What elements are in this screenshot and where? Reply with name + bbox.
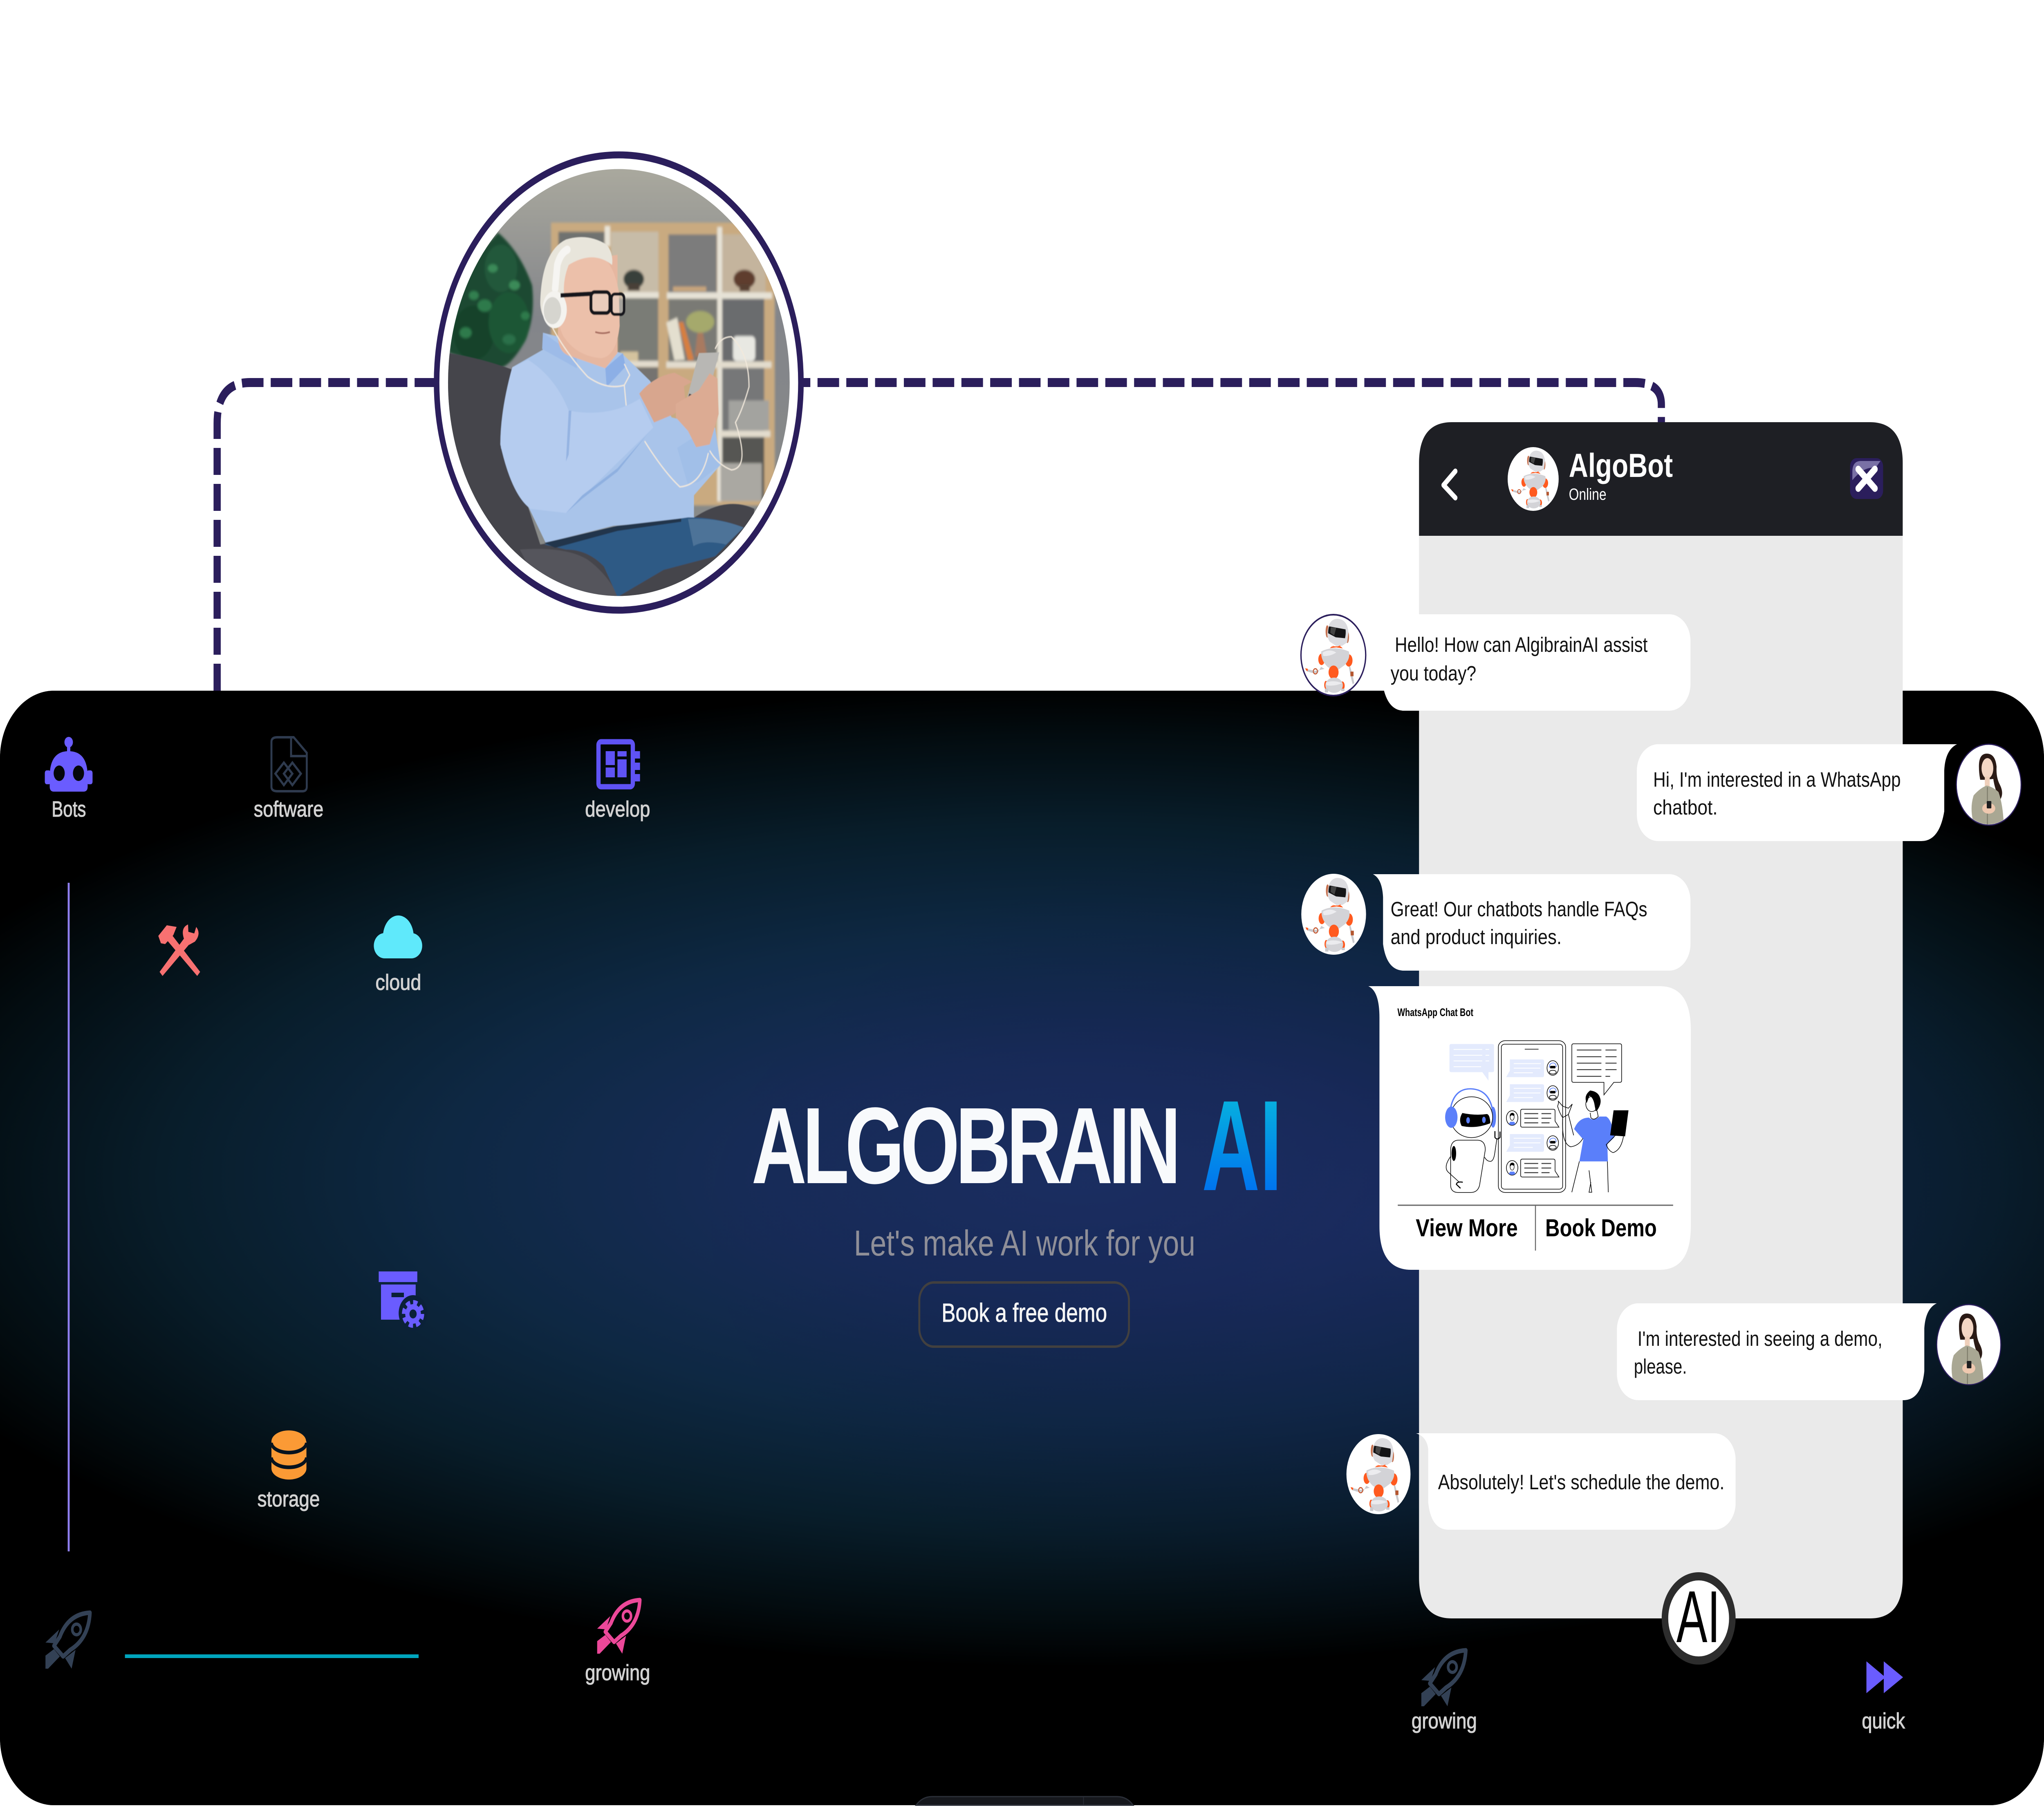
label: storage: storage — [258, 1487, 320, 1511]
header title: Online — [1569, 485, 1607, 504]
tagline: Let's make AI work for you — [854, 1223, 1195, 1263]
icon: quick arrows — [1867, 1661, 1903, 1693]
avatar: robot 1 — [1301, 615, 1366, 696]
bubble: bot greeting — [1370, 614, 1690, 711]
bubble: bot greeting: Hello! How can AlgibrainAI assist — [1395, 633, 1648, 656]
button: book a free demo: Book a free demo — [941, 1299, 1107, 1327]
bubble: bot greeting: you today? — [1391, 662, 1476, 685]
teal horizontal line — [125, 1654, 419, 1658]
header title: AlgoBot — [1569, 447, 1673, 484]
photo: senior man using phone — [437, 155, 801, 610]
brand heading: ALGOBRAIN — [751, 1085, 1177, 1206]
bubble: user demo request: please. — [1634, 1355, 1687, 1378]
card divider lines — [1398, 1205, 1673, 1251]
dark hero panel — [0, 691, 2044, 1805]
bubble: user whatsapp request: Hi, I'm interested in a WhatsApp — [1653, 768, 1901, 791]
brand heading: AI — [1202, 1074, 1282, 1217]
chat panel — [1419, 422, 1903, 1618]
label: software: software — [254, 797, 323, 821]
partial bottom bar — [916, 1797, 1133, 1805]
card: whatsapp chat bot — [1368, 986, 1691, 1270]
bubble: bot schedule reply — [1416, 1433, 1736, 1530]
icon: pink rocket — [597, 1600, 640, 1654]
icon: dark rocket left — [45, 1613, 90, 1669]
icon: cloud — [374, 915, 422, 958]
card action: view more: View More — [1416, 1214, 1518, 1242]
label: develop: develop — [585, 797, 650, 821]
icon: develop — [598, 742, 640, 787]
icon: software file — [271, 737, 307, 791]
bubble: user demo request: I'm interested in seeing a demo, — [1638, 1327, 1883, 1350]
bubble: bot FAQ reply: Great! Our chatbots handle FAQs — [1391, 897, 1647, 921]
icon: archive settings — [379, 1271, 428, 1331]
card title: WhatsApp Chat Bot — [1397, 1007, 1473, 1019]
card action: book demo: Book Demo — [1545, 1214, 1657, 1242]
vertical purple line — [68, 883, 69, 1551]
illustration: robot, phone and person chatting — [1445, 1041, 1629, 1193]
chat header back arrow — [1443, 471, 1455, 498]
close button — [1850, 458, 1883, 499]
icon: tools — [158, 924, 200, 976]
label: quick: quick — [1862, 1709, 1905, 1733]
bubble: user whatsapp request: chatbot. — [1653, 796, 1718, 819]
avatar: woman 2 — [1937, 1305, 2001, 1385]
icon: bots — [45, 737, 92, 792]
dashed connector line — [217, 383, 1661, 691]
bubble: bot FAQ reply — [1373, 874, 1690, 971]
header title — [1569, 447, 1673, 504]
button: book a free demo — [919, 1282, 1129, 1347]
icon: storage database — [271, 1430, 307, 1479]
label: Bots: Bots — [52, 797, 86, 821]
avatar: woman 1 — [1957, 744, 2021, 826]
brand heading — [751, 1074, 1282, 1217]
AI badge: AI — [1676, 1575, 1720, 1658]
icon: dark rocket right — [1421, 1650, 1466, 1706]
avatar: robot 3 — [1347, 1434, 1410, 1514]
bubble: user demo request — [1617, 1303, 1937, 1400]
label: growing right: growing — [1412, 1709, 1477, 1733]
bubble: user whatsapp request — [1637, 744, 1957, 841]
avatar: robot 2 — [1301, 874, 1366, 955]
label: cloud: cloud — [375, 971, 421, 995]
bubble: bot FAQ reply: and product inquiries. — [1391, 925, 1562, 949]
header avatar: robot — [1508, 447, 1559, 511]
label: growing: growing — [585, 1661, 650, 1685]
bubble: bot schedule reply: Absolutely! Let's schedule the demo. — [1438, 1470, 1724, 1494]
